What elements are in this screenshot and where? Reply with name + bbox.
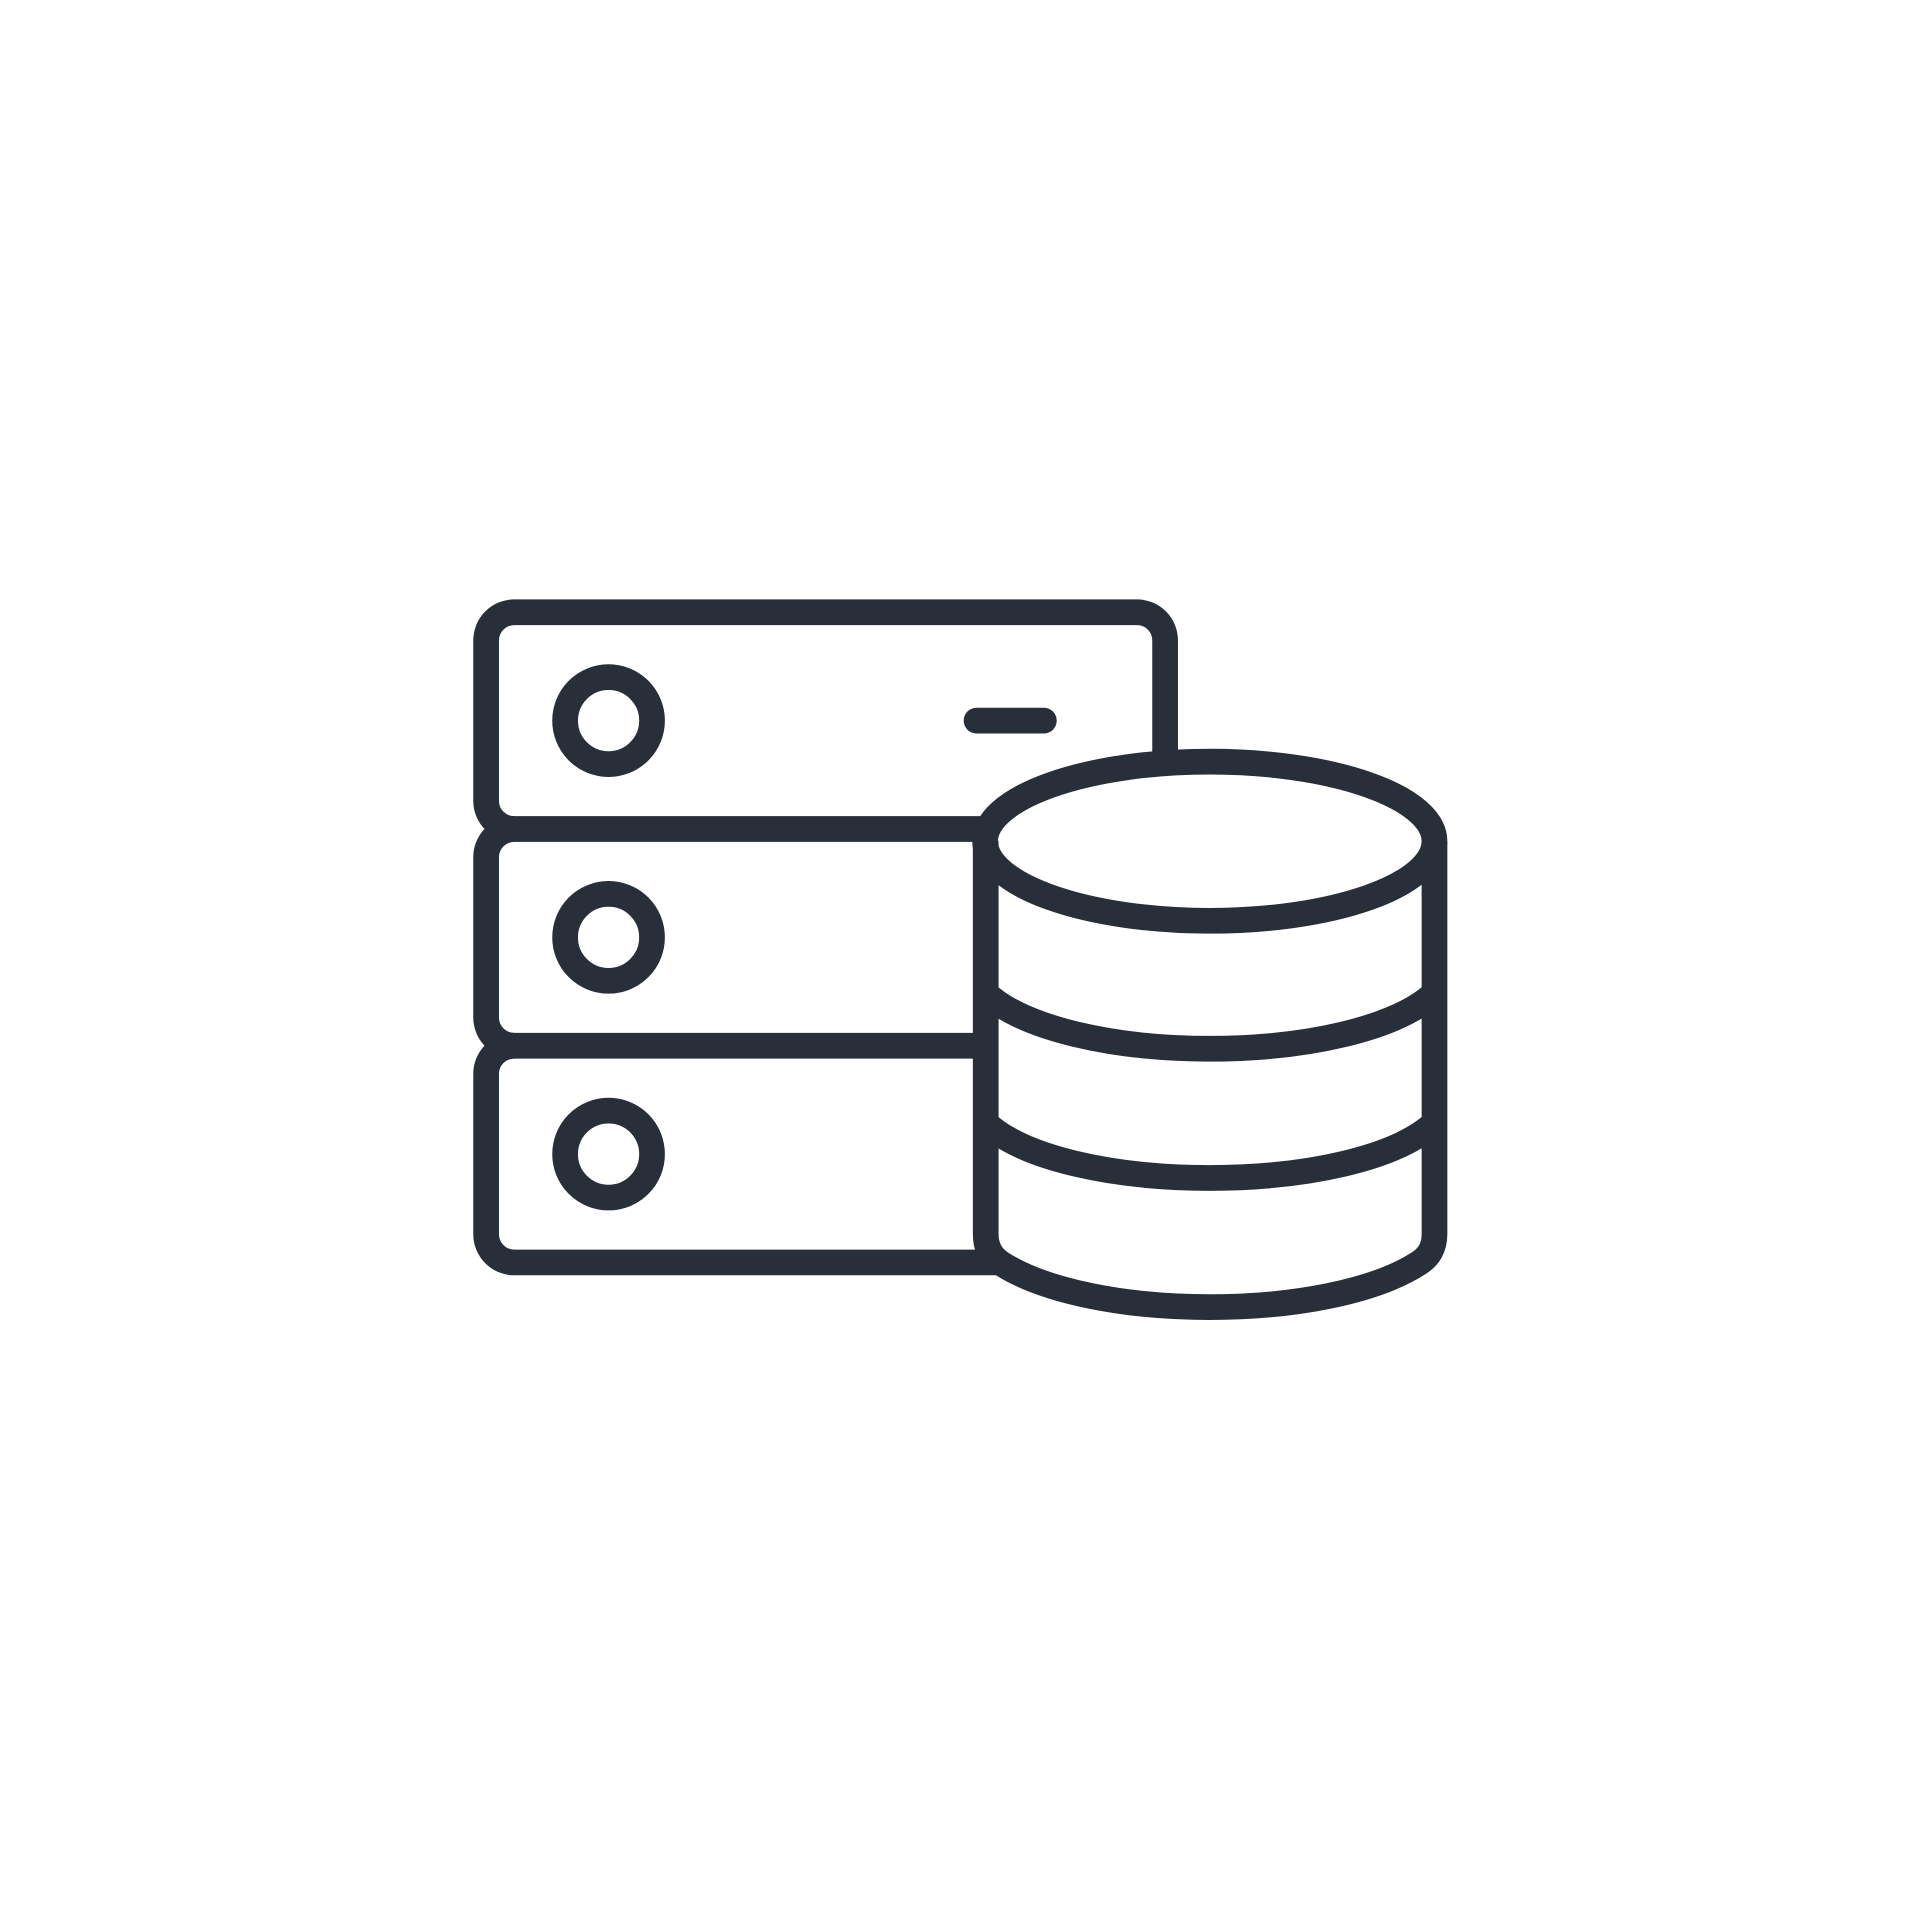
icon: bottom server indicator ring [565, 1111, 652, 1198]
database top ellipse [985, 762, 1434, 921]
database body outline [986, 841, 1434, 1307]
database upper band [986, 993, 1434, 1049]
icon: middle server indicator ring [565, 894, 652, 981]
icon: top server indicator ring [565, 677, 652, 764]
server unit: bottom [486, 1046, 1004, 1262]
server unit: middle [486, 829, 986, 1046]
panel: server stack [486, 612, 1165, 1262]
panel: database cylinder [985, 762, 1434, 1307]
icon: top server slot dash [977, 710, 1044, 731]
database lower band [986, 1123, 1434, 1178]
server unit: top [486, 612, 1165, 829]
